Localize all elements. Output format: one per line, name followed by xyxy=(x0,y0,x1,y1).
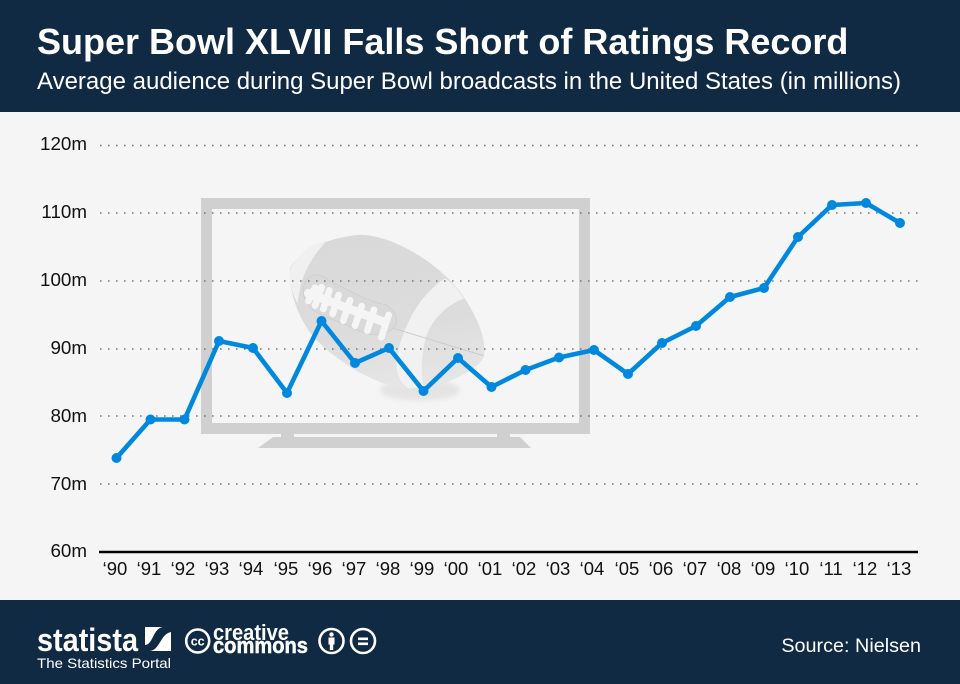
x axis labels xyxy=(103,558,911,579)
icon: statista mark xyxy=(145,627,171,651)
x axis xyxy=(99,551,918,553)
logo: statista xyxy=(37,622,171,671)
x axis labels: ‘11 xyxy=(819,558,843,579)
x axis labels: ‘10 xyxy=(785,558,809,579)
x axis labels: ‘95 xyxy=(274,558,298,579)
x axis labels: ‘08 xyxy=(717,558,741,579)
x axis labels: ‘04 xyxy=(580,558,604,579)
y axis labels: 90m xyxy=(50,337,87,358)
y axis labels: 60m xyxy=(50,540,87,561)
x axis labels: ‘98 xyxy=(376,558,400,579)
x axis labels: ‘12 xyxy=(853,558,877,579)
x axis labels: ‘90 xyxy=(103,558,127,579)
y axis labels: 110m xyxy=(41,201,87,222)
x axis labels: ‘92 xyxy=(171,558,195,579)
logo: creative commons xyxy=(186,620,308,658)
x axis labels: ‘94 xyxy=(239,558,263,579)
icon: no derivatives xyxy=(351,629,375,653)
icon: attribution xyxy=(320,629,344,653)
logo: creative commons: cc xyxy=(191,634,205,648)
logo: creative commons: commons xyxy=(213,633,308,658)
x axis labels: ‘97 xyxy=(342,558,366,579)
x axis labels: ‘01 xyxy=(478,558,502,579)
x axis labels: ‘91 xyxy=(137,558,161,579)
logo: creative commons: creative xyxy=(213,620,289,645)
x axis labels: ‘06 xyxy=(649,558,673,579)
source: Source: Nielsen xyxy=(781,635,921,657)
x axis labels: ‘00 xyxy=(444,558,468,579)
y axis labels: 120m xyxy=(40,133,87,154)
data points xyxy=(112,198,905,463)
header band xyxy=(0,0,960,112)
title: Super Bowl XLVII Falls Short of Ratings Record xyxy=(37,21,848,62)
subtitle: Average audience during Super Bowl broadcasts in the United States (in millions) xyxy=(37,68,901,95)
y axis labels: 70m xyxy=(50,473,87,494)
y axis labels: 100m xyxy=(40,269,87,290)
x axis labels: ‘99 xyxy=(410,558,434,579)
x axis labels: ‘05 xyxy=(615,558,639,579)
logo: statista: statista xyxy=(37,622,138,658)
line chart xyxy=(40,133,920,579)
y axis labels xyxy=(40,133,87,561)
icon: football xyxy=(290,235,484,401)
x axis labels: ‘07 xyxy=(683,558,707,579)
x axis labels: ‘09 xyxy=(751,558,775,579)
illustration: television with football xyxy=(201,198,590,448)
x axis labels: ‘96 xyxy=(308,558,332,579)
footer band xyxy=(0,600,960,684)
x axis labels: ‘02 xyxy=(512,558,536,579)
x axis labels: ‘03 xyxy=(546,558,570,579)
logo: statista: The Statistics Portal xyxy=(37,655,171,671)
data line xyxy=(116,203,900,458)
icon: television xyxy=(201,198,590,448)
gridlines xyxy=(100,146,920,484)
x axis labels: ‘93 xyxy=(205,558,229,579)
y axis labels: 80m xyxy=(50,405,87,426)
x axis labels: ‘13 xyxy=(887,558,911,579)
